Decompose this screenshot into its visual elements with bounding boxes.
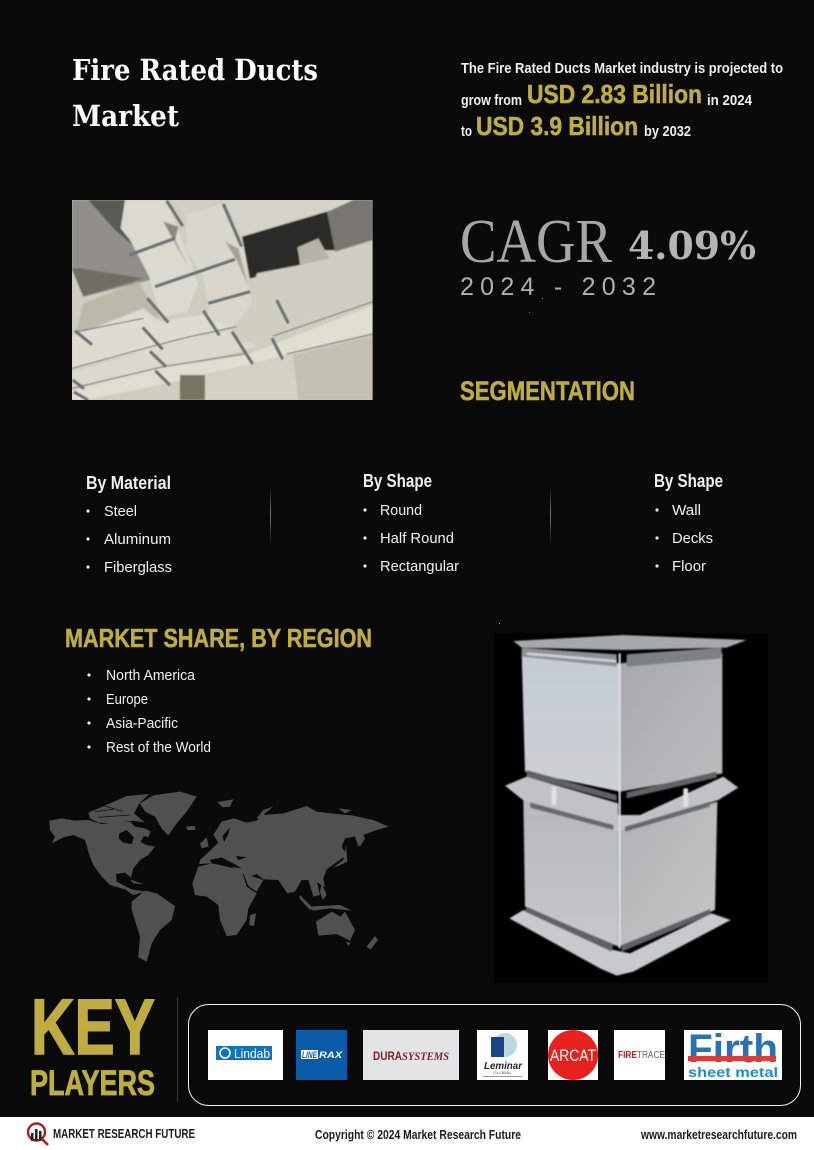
heading: market share by region: MARKET SHARE, BY REGION xyxy=(65,623,372,653)
column: by material: By Material xyxy=(86,473,171,493)
logo: Lindab: Lindab xyxy=(234,1046,270,1061)
CAGR figure xyxy=(460,208,756,313)
column: by material xyxy=(86,473,172,576)
column: by material: Fiberglass xyxy=(104,559,172,576)
market projection text: grow from xyxy=(461,92,522,109)
logo: Linx Rax xyxy=(296,1030,347,1080)
region list: Europe xyxy=(106,691,148,708)
column: by shape (application): By Shape xyxy=(654,471,723,491)
logo: Leminar: Leminar xyxy=(484,1061,523,1072)
market projection text: in 2024 xyxy=(707,92,753,109)
photo: fire rated ducts on ceiling xyxy=(72,200,373,400)
photo: galvanized square duct xyxy=(494,633,768,983)
footer: MARKET RESEARCH FUTURE xyxy=(53,1127,195,1141)
region list: Rest of the World xyxy=(106,739,211,756)
column: by material: Aluminum xyxy=(104,531,171,548)
logo: DuraSystems: SYSTEMS xyxy=(402,1049,449,1063)
logo: Firth sheet metal: Firth xyxy=(688,1027,778,1071)
logo: Linx Rax: RAX xyxy=(319,1050,343,1060)
title xyxy=(72,53,318,133)
title: Fire Rated Ducts xyxy=(72,53,318,87)
column: by shape: Round xyxy=(380,502,422,519)
logo: Firth sheet metal: sheet metal xyxy=(688,1064,778,1080)
heading: segmentation: SEGMENTATION xyxy=(460,376,635,406)
column: by shape: Half Round xyxy=(380,530,454,547)
CAGR figure: CAGR xyxy=(460,208,613,276)
title: Market xyxy=(72,99,180,133)
logo: Leminar xyxy=(477,1030,528,1080)
column: by shape xyxy=(363,471,459,575)
logo: Firetrace: FIRETRACE xyxy=(618,1050,665,1061)
market projection text: USD 3.9 Billion xyxy=(476,111,638,141)
logo: ARCAT: ARCAT xyxy=(550,1046,596,1065)
divider xyxy=(177,997,178,1102)
logo: Leminar: GLOBAL xyxy=(493,1070,513,1075)
logo: DuraSystems: DURA xyxy=(373,1049,402,1063)
divider 1 xyxy=(270,486,271,544)
region list: North America xyxy=(106,667,196,684)
logo: ARCAT xyxy=(548,1030,598,1080)
key players heading: KEY xyxy=(31,982,155,1071)
key players heading: PLAYERS xyxy=(30,1064,155,1103)
key players panel xyxy=(188,1004,800,1106)
logo: DuraSystems xyxy=(363,1030,459,1080)
column: by shape (application) xyxy=(654,471,723,575)
region list: Asia-Pacific xyxy=(106,715,178,732)
market projection text: USD 2.83 Billion xyxy=(527,79,702,109)
column: by shape: By Shape xyxy=(363,471,432,491)
column: by shape (application): Wall xyxy=(672,502,701,519)
key players heading xyxy=(30,982,155,1103)
column: by shape (application): Floor xyxy=(672,558,706,575)
column: by shape: Rectangular xyxy=(380,558,459,575)
logo: Firetrace xyxy=(614,1030,665,1080)
column: by shape (application): Decks xyxy=(672,530,713,547)
footer xyxy=(0,1117,814,1150)
CAGR figure: 2024 - 2032 xyxy=(460,273,656,301)
market projection text: to xyxy=(461,123,472,140)
divider 2 xyxy=(550,486,551,544)
world map xyxy=(49,792,389,962)
CAGR figure: 4.09% xyxy=(628,223,756,268)
small speck xyxy=(499,623,500,624)
market projection text: by 2032 xyxy=(644,123,691,140)
column: by material: Steel xyxy=(104,503,137,520)
logo: Lindab xyxy=(208,1030,283,1080)
icon: MRFR magnifier logo xyxy=(28,1124,48,1145)
footer: Copyright © 2024 Market Research Future xyxy=(315,1128,521,1142)
logo: Linx Rax: LINE xyxy=(302,1050,318,1060)
market projection text xyxy=(461,60,783,141)
region list xyxy=(87,667,211,756)
